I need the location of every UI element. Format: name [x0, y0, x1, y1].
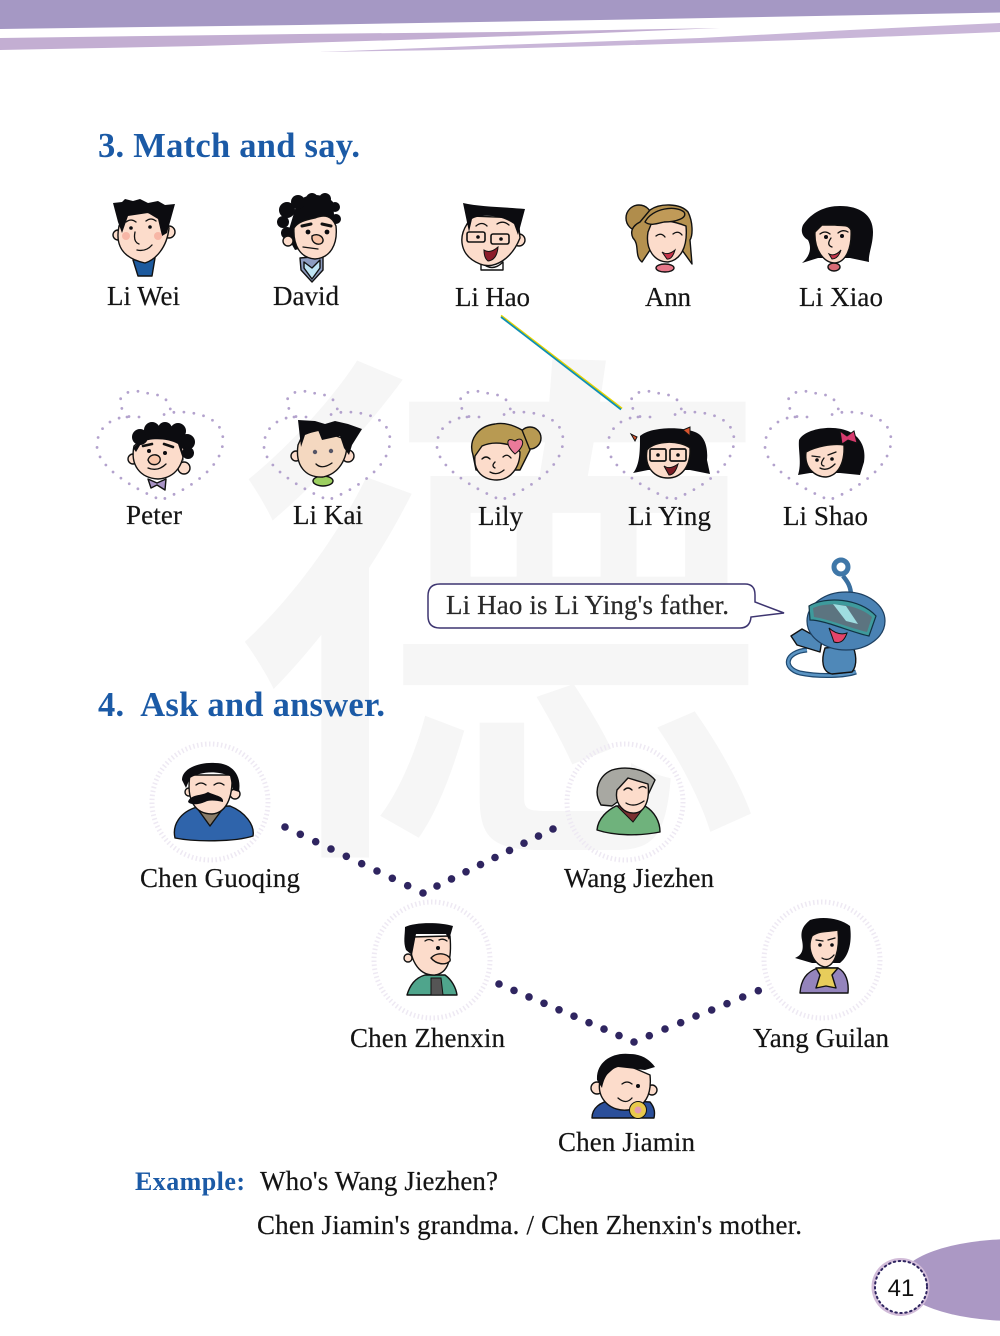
- name labels: grandparents: Chen Guoqing: [140, 863, 300, 893]
- heart frame: Li Kai: [264, 391, 390, 500]
- name labels: second row: Li Kai: [293, 500, 363, 530]
- character: Li Ying: [631, 427, 710, 478]
- family tree: Chen Jiamin: [591, 1054, 657, 1118]
- dotted link: Wang Jiezhen to couple point: [433, 825, 557, 890]
- character: Li Xiao: [802, 206, 873, 271]
- name labels: first row: Li Xiao: [799, 282, 883, 312]
- character: David: [277, 193, 341, 282]
- match line: Li Hao to Li Ying: [501, 316, 622, 410]
- character row: parents and adults: [113, 193, 873, 282]
- character: Li Shao: [798, 428, 864, 477]
- family tree: Wang Jiezhen: [567, 744, 683, 860]
- character: Lily: [472, 423, 541, 480]
- heading: section 4: 4. Ask and answer.: [98, 686, 385, 724]
- name labels: parents: Yang Guilan: [753, 1023, 890, 1053]
- name labels: second row: Peter: [126, 500, 182, 530]
- example dialogue: Who's Wang Jiezhen?: [260, 1166, 498, 1196]
- speech bubble: [428, 584, 784, 628]
- family tree: Chen Guoqing: [152, 744, 268, 860]
- speech bubble: Li Hao is Li Ying's father.: [446, 590, 729, 620]
- heart frame: Li Ying: [608, 391, 734, 500]
- name labels: grandparents: [140, 863, 714, 893]
- name labels: first row: Ann: [645, 282, 692, 312]
- name labels: second row: Lily: [478, 501, 524, 531]
- name labels: first row: Li Wei: [107, 281, 180, 311]
- example dialogue: Example:: [135, 1167, 245, 1196]
- character: Li Wei: [113, 199, 175, 276]
- name labels: parents: [350, 1023, 890, 1053]
- dotted link: Yang Guilan to child: [646, 987, 762, 1039]
- example dialogue: Chen Jiamin's grandma. / Chen Zhenxin's mother.: [257, 1210, 802, 1240]
- name labels: first row: Li Hao: [455, 282, 530, 312]
- character row: children in dotted hearts: [97, 391, 891, 500]
- character: Ann: [626, 205, 692, 272]
- name label: child: Chen Jiamin: [558, 1127, 696, 1157]
- name labels: second row: Li Ying: [628, 501, 711, 531]
- name labels: parents: Chen Zhenxin: [350, 1023, 506, 1053]
- top decorative band: [0, 0, 1000, 52]
- example dialogue: [135, 1166, 802, 1240]
- character: Li Hao: [462, 203, 525, 270]
- name labels: first row: [107, 281, 883, 312]
- dotted link: Chen Guoqing to couple point: [281, 823, 427, 897]
- character: Li Kai: [291, 420, 362, 486]
- background watermark character: 德: [232, 192, 767, 967]
- heading: section 3: 3. Match and say.: [98, 127, 360, 165]
- name labels: grandparents: Wang Jiezhen: [564, 863, 714, 893]
- heart frame: Lily: [437, 391, 563, 500]
- name labels: second row: [126, 500, 868, 531]
- page number badge: [872, 1239, 1000, 1321]
- character: Peter: [128, 422, 195, 490]
- name labels: first row: David: [273, 281, 340, 311]
- name labels: second row: Li Shao: [783, 501, 868, 531]
- family tree: Yang Guilan: [764, 902, 880, 1018]
- page number badge: 41: [888, 1275, 914, 1302]
- family tree: Chen Zhenxin: [374, 902, 490, 1018]
- mascot: blue alien with goggles: [788, 560, 885, 676]
- dotted link: Chen Zhenxin to child: [495, 980, 638, 1046]
- heart frame: Li Shao: [765, 391, 891, 500]
- heart frame: Peter: [97, 391, 223, 500]
